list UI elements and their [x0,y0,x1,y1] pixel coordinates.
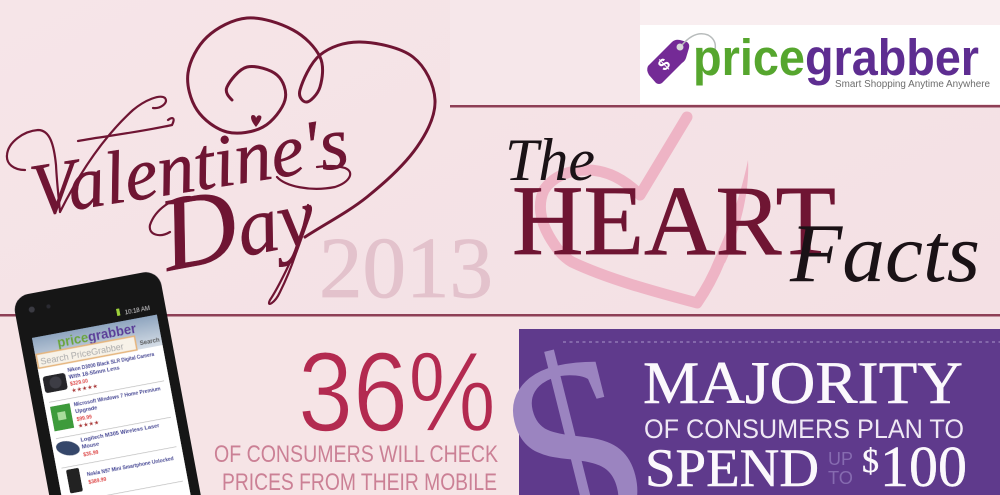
up to: UP [828,449,853,469]
panel: majority spend [477,294,1000,495]
stat number: 36% [298,329,496,455]
$100: $ [862,443,879,480]
logo word: grabber: grabber [805,29,979,86]
icon: smartphone [12,270,206,495]
phone status bar [116,303,151,318]
of consumers plan to: OF CONSUMERS PLAN TO [644,414,964,444]
listing: camera: Nikon D3000 Black SLR Digital Camera [67,352,156,374]
listing: mouse: Mouse [81,442,100,451]
listing: mouse [52,418,177,469]
listing: software: ★★★★ [77,419,100,430]
logo tagline: Smart Shopping Anytime Anywhere [835,79,990,90]
icon: price tag: $ [654,54,675,75]
stat: 36 percent [214,329,498,495]
listing: mouse: $35.99 [83,450,99,458]
title: Valentine's Day [7,18,435,304]
phone search box: Search PriceGrabber [40,341,125,367]
logo word: price: price [693,29,805,86]
listing: smartphone: Nokia N97 Mini Smartphone Unlocked [87,456,174,478]
listing: camera: With 18-55mm Lens [68,365,120,381]
stat caption: OF CONSUMERS WILL CHECK [214,441,498,468]
MAJORITY: MAJORITY [643,350,963,416]
stat caption [214,441,498,495]
logo panel [640,25,1000,104]
listing: smartphone [62,449,183,495]
listing: mouse: Logitech M305 Wireless Laser [80,423,161,444]
phone logo: pricegrabber [56,320,138,350]
listing: software [50,385,171,439]
phone search box [36,332,161,368]
listing: camera: $329.00 [70,378,89,388]
listing: camera: ★★★★★ [71,383,99,395]
Facts: Facts [789,207,980,300]
phone status bar: 10:18 AM [125,306,151,316]
The: The [505,127,595,193]
up to [828,449,853,488]
year 2013: 2013 [319,219,493,316]
listing: software: $99.99 [76,414,93,423]
script flourishes on letters [7,97,350,304]
listing: camera [42,351,164,403]
HEART: HEART [512,165,836,276]
divider middle [0,314,1000,316]
heart outline behind heading [540,117,748,303]
up to: TO [828,468,853,488]
heading: The Heart Facts [505,127,980,300]
heart flourish [188,18,435,237]
phone screen [32,315,195,495]
script word Day: Day [148,149,323,294]
icon: small heart on i [251,115,261,127]
divider top [450,105,1000,108]
script word Valentine's: Valentine's [25,101,354,233]
phone search box: Search [139,338,161,347]
listing: software: Microsoft Windows 7 Home Premium [74,386,161,408]
listing: smartphone: $389.99 [88,477,107,486]
icon: price tag [647,34,715,84]
listing: software: Upgrade [75,405,98,415]
